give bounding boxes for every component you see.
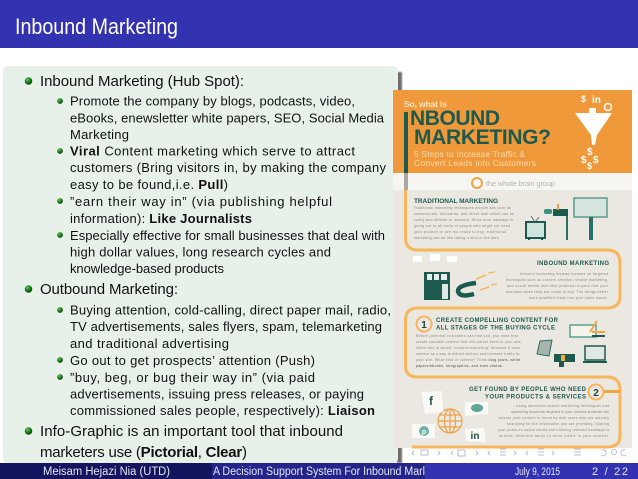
- icon: laptop: [583, 346, 607, 363]
- step 1: content as a way to attract visitors and increase traffic to: [416, 352, 519, 356]
- orange header: 5 Steps to Increase Traffic &: [414, 149, 525, 159]
- icon: linkedin: [465, 428, 486, 442]
- section: traditional marketing: costly and difficult to measure. Since your message is: [414, 218, 513, 222]
- icon: funnel: $: [581, 94, 586, 104]
- section: traditional marketing: marketing can be like taking a shot in the dark.: [414, 236, 500, 240]
- step 2: searching for the information you are providing. Sharing: [507, 422, 609, 426]
- section: traditional marketing: Traditional marketing techniques involve ads such as: [414, 206, 511, 210]
- icon: facebook: [421, 391, 443, 414]
- logo: the whole brain group: the whole brain group: [486, 179, 555, 188]
- bullet list: Go out to get prospects’ attention (Push): [70, 353, 315, 368]
- orange header: MARKETING?: [414, 126, 551, 149]
- bullet list: and traditional advertising: [70, 336, 229, 351]
- orange header: NBOUND: [410, 107, 500, 130]
- step 1: 1: [421, 320, 427, 331]
- bullet list: ”earn their way in” (via publishing helpful: [70, 194, 332, 209]
- section: traditional marketing: commercials, billboards, and direct mail which can be: [414, 212, 514, 216]
- bullet list: high dollar values, long research cycles and: [70, 244, 331, 260]
- icon: funnel: $: [581, 155, 587, 166]
- section: inbound marketing: [413, 254, 609, 300]
- footer bar: 2 / 22: [592, 466, 628, 478]
- section: traditional marketing: TRADITIONAL MARKETING: [414, 198, 498, 205]
- bullet list: Info-Graphic is an important tool that inbound: [40, 423, 343, 440]
- bullet list: Especially effective for small businesses that deal with: [70, 228, 385, 243]
- step 2: Using advanced search marketing techniques and: [516, 404, 609, 408]
- section: inbound marketing: Inbound marketing instead focuses on targeted: [520, 272, 608, 276]
- step 1: [416, 316, 607, 368]
- orange header: Convert Leads into Customers: [414, 158, 536, 168]
- bullet list: easy to be found,i.e. Pull): [70, 177, 228, 192]
- bullet list: customers (Bring visitors in, by making the company: [70, 160, 386, 175]
- icon: funnel: $: [593, 155, 599, 166]
- step 2: [412, 384, 620, 442]
- orange path: [406, 190, 620, 447]
- icon: billboard: [574, 198, 607, 240]
- step 2: 2: [593, 388, 599, 399]
- bullet list: Marketing: [70, 127, 129, 142]
- section: inbound marketing: INBOUND MARKETING: [537, 261, 609, 267]
- bullet list: marketers use (Pictorial, Clear): [40, 444, 247, 461]
- step 2: another effective tactic to drive traffic to your content.: [499, 434, 609, 438]
- title: Inbound Marketing: [15, 14, 178, 39]
- section: traditional marketing: [414, 198, 607, 240]
- footer bar: Meisam Hejazi Nia (UTD): [43, 466, 170, 478]
- step 2: ensure your content is found by web users who are actively: [499, 416, 609, 420]
- step 2: GET FOUND BY PEOPLE WHO NEED: [469, 387, 587, 393]
- bullet list: advertisements, issuing press releases, or paying: [70, 386, 364, 402]
- bullet list: information): Like Journalists: [70, 211, 252, 226]
- section: traditional marketing: going out to all sorts of people who might not need: [414, 224, 510, 228]
- icon: pinterest: [412, 424, 435, 438]
- navigation symbols: [412, 449, 626, 456]
- bullet list: Promote the company by blogs, podcasts, video,: [70, 94, 355, 108]
- icon: magnet: [458, 272, 497, 295]
- bullet list: [25, 73, 391, 461]
- orange header: So, what is: [404, 99, 447, 109]
- section: inbound marketing: techniques such as content creation, search marketing,: [506, 278, 608, 282]
- icon: globe: [438, 409, 462, 433]
- bullet list: eBooks, enewsletter white papers, SEO, Social Media: [70, 110, 385, 126]
- section: traditional marketing: your product or are not ready to buy, traditional: [414, 230, 506, 234]
- bullet list: commissioned sales people, respectively): Liaison: [70, 403, 375, 418]
- icon: open book: [570, 321, 605, 337]
- icon: funnel: $: [587, 147, 593, 158]
- section: inbound marketing: more qualified leads into your sales funnel.: [529, 296, 608, 300]
- icon: storefront: [413, 254, 457, 300]
- step 1: Before potential customers can find you, you must first: [416, 334, 518, 338]
- step 1: your site. What kind of content? Think blog posts, white: [416, 358, 520, 362]
- bullet list: Inbound Marketing (Hub Spot):: [40, 73, 244, 90]
- bullet list: knowledge-based products: [70, 261, 224, 276]
- step 1: CREATE COMPELLING CONTENT FOR: [436, 318, 559, 324]
- orange header: [393, 90, 632, 190]
- footer bar: July 9, 2015: [515, 466, 560, 478]
- icon: pinterest: p: [422, 429, 426, 436]
- bullet list: TV advertisements, sales flyers, spam, telemarketing: [70, 319, 382, 334]
- icon: linkedin: in: [471, 431, 479, 442]
- step 1: create valuable content that will attract them to your site.: [416, 340, 522, 344]
- icon: television: [526, 216, 545, 240]
- footer bar: [0, 463, 638, 479]
- panel: text content: [3, 66, 402, 463]
- icon: twitter: [465, 402, 488, 416]
- icon: paper: [537, 340, 552, 356]
- step 2: optimizing keywords targeted to your desired audience will: [511, 410, 609, 414]
- icon: binoculars: [554, 354, 575, 367]
- step 1: papers/ebooks, infographics, and even videos.: [416, 364, 503, 368]
- section: inbound marketing: and social media that help potential buyers find your: [507, 284, 609, 288]
- title bar: [0, 0, 638, 48]
- bullet list: Viral Content marketing which serve to attract: [70, 144, 355, 158]
- step 2: YOUR PRODUCTS & SERVICES: [485, 394, 586, 400]
- bullet list: Buying attention, cold-calling, direct paper mail, radio,: [70, 302, 391, 318]
- icon: facebook: f: [429, 394, 434, 408]
- step 2: your posts on social media and utilizing relevant hashtags is: [498, 428, 609, 432]
- step 1: Often this is called "content marketing" because it uses: [416, 346, 520, 350]
- icon: mailbox: [544, 204, 568, 240]
- bullet list: ”buy, beg, or bug their way in” (via paid: [70, 370, 315, 385]
- footer bar: A Decision Support System For Inbound Marl: [213, 466, 425, 478]
- step 1: ALL STAGES OF THE BUYING CYCLE: [436, 326, 555, 332]
- section: inbound marketing: business when they are ready to buy. The brings better: [506, 290, 609, 294]
- bullet list: Outbound Marketing:: [40, 281, 178, 298]
- icon: funnel: $: [587, 161, 592, 171]
- icon: funnel: [575, 94, 612, 171]
- icon: funnel: in: [592, 95, 601, 106]
- infographic: [393, 90, 632, 448]
